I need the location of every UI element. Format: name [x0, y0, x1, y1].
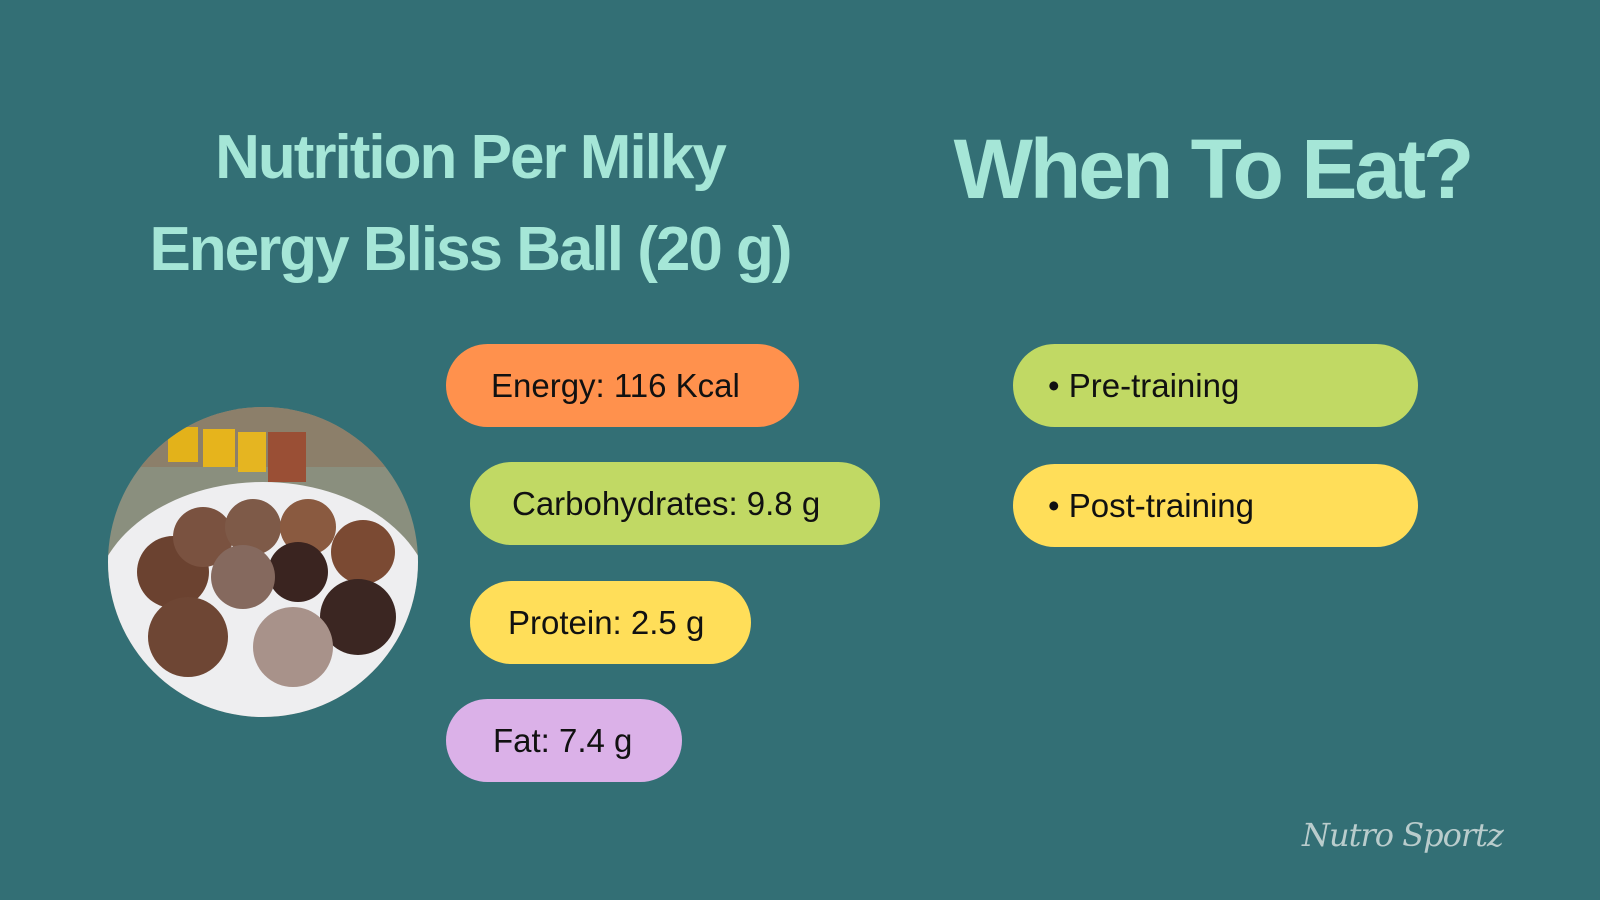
- pill: pre-training: [1013, 344, 1418, 427]
- pill: fat: [446, 699, 682, 782]
- pill: post-training: • Post-training: [1048, 487, 1254, 524]
- pill: protein: [470, 581, 751, 664]
- logo: Nutro Sportz: [1302, 816, 1503, 854]
- pill: protein: Protein: 2.5 g: [508, 604, 704, 641]
- pill: carbohydrates: [470, 462, 880, 545]
- title: nutrition: Energy Bliss Ball (20 g): [149, 215, 791, 284]
- title: nutrition: [149, 123, 791, 284]
- title: when to eat: When To Eat?: [954, 122, 1471, 216]
- pill: pre-training: • Pre-training: [1048, 367, 1239, 404]
- pill: post-training: [1013, 464, 1418, 547]
- pill: energy: Energy: 116 Kcal: [491, 367, 740, 404]
- title: nutrition: Nutrition Per Milky: [215, 123, 725, 192]
- pill: energy: [446, 344, 799, 427]
- photo: bliss balls: [108, 407, 418, 717]
- pill: carbohydrates: Carbohydrates: 9.8 g: [512, 485, 820, 522]
- pill: fat: Fat: 7.4 g: [493, 722, 632, 759]
